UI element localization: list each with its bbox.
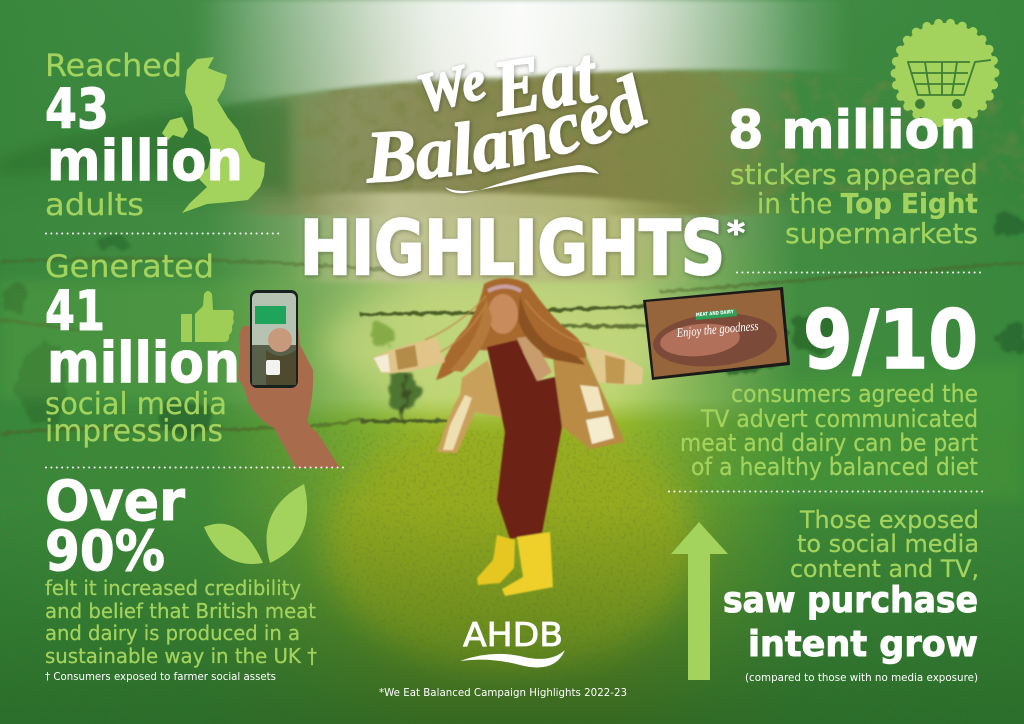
text: those exposed <box>790 506 979 583</box>
logo: We Eat Balanced: We <box>411 49 492 126</box>
text: Over: Over <box>45 469 185 533</box>
text: credibility sentence: and belief that British meat <box>45 599 316 623</box>
logo: AHDB <box>460 615 565 667</box>
dress <box>487 340 562 539</box>
arrow: up <box>671 522 728 680</box>
coat right <box>553 357 625 449</box>
text: TV sentence: TV advert communicated <box>700 405 978 433</box>
text: TV sentence <box>680 380 978 481</box>
boots <box>477 535 515 585</box>
logo: We Eat Balanced: Eat <box>486 31 604 134</box>
icon: UK map <box>162 57 265 213</box>
text: TV sentence: consumers agreed the <box>731 380 978 408</box>
text: credibility sentence: felt it increased credibility <box>45 576 301 600</box>
number: 8 million: 8 million <box>728 100 976 161</box>
grass speckle <box>0 430 1024 724</box>
text: saw purchase intent grow: saw purchase <box>723 580 978 621</box>
icon: TV screen: MEAT AND DAIRY <box>696 309 734 318</box>
face <box>488 294 518 334</box>
title: HIGHLIGHTS: * <box>727 214 745 252</box>
logo: We Eat Balanced: Balanced <box>366 72 650 186</box>
text: stickers sentence: supermarkets <box>785 217 978 250</box>
text: Reached: Reached <box>45 48 182 84</box>
pale valley field <box>290 192 700 282</box>
text: credibility sentence: sustainable way in the UK † <box>45 644 317 668</box>
text: million: million <box>47 129 243 194</box>
tree <box>370 323 419 420</box>
icon: thumbs up <box>181 291 234 342</box>
right and left far hills <box>680 72 1024 205</box>
text: credibility sentence: and dairy is produced in a <box>45 621 300 645</box>
text: stickers sentence: in the Top Eight <box>757 187 978 220</box>
panel: TV advert <box>643 287 978 481</box>
hair back <box>436 278 587 380</box>
title: HIGHLIGHTS: HIGHLIGHTS <box>300 204 725 292</box>
icon: TV screen: Enjoy the goodness <box>675 318 759 340</box>
text: million: million <box>47 331 240 396</box>
chest <box>517 336 552 382</box>
text: social media: social media <box>45 387 227 422</box>
number: 9/10: 9/10 <box>803 294 978 388</box>
text: stickers sentence: stickers appeared <box>730 158 978 191</box>
illustration: girl <box>373 278 643 596</box>
icon: leaves <box>204 484 307 564</box>
text: credibility sentence <box>45 576 317 668</box>
number: 43: 43 <box>45 77 109 141</box>
text: those exposed: content and TV, <box>790 555 979 583</box>
text: Generated: Generated <box>45 249 214 285</box>
sky glow <box>190 0 850 112</box>
hedgerows <box>0 259 1024 434</box>
number: 41: 41 <box>45 279 105 343</box>
icon: shopping cart badge <box>895 23 995 123</box>
text: 90%: 90% <box>45 519 165 583</box>
text: adults: adults <box>45 188 144 223</box>
logo: AHDB: AHDB <box>463 615 563 654</box>
text: stickers sentence <box>730 158 978 250</box>
text: those exposed: to social media <box>797 530 979 558</box>
footnote: compared: (compared to those with no media exposure) <box>745 671 978 684</box>
panel: social impressions <box>45 249 240 449</box>
text: those exposed: Those exposed <box>799 506 979 534</box>
icon: TV screen <box>643 287 790 380</box>
hair front <box>518 296 585 365</box>
text: impressions: impressions <box>45 414 223 449</box>
panel: credibility <box>45 469 317 683</box>
footnote: campaign highlights: *We Eat Balanced Campaign Highlights 2022-23 <box>379 686 627 699</box>
pale meadow <box>325 283 675 407</box>
footnote: consumers: † Consumers exposed to farmer social assets <box>45 670 276 683</box>
lighter field patches <box>0 280 1024 500</box>
text: TV sentence: meat and dairy can be part <box>680 429 978 457</box>
icon: hand holding phone <box>238 290 340 468</box>
coat left <box>437 360 505 453</box>
panel: reach <box>45 48 265 223</box>
grass yellow glow <box>325 420 695 670</box>
panel: stickers <box>728 23 995 250</box>
hills with autumn woodland <box>230 71 800 215</box>
left sleeve <box>373 338 445 373</box>
trees on left and right <box>3 212 1024 436</box>
panel: purchase intent <box>671 506 979 684</box>
panel: purchase intent: intent grow <box>748 624 978 665</box>
right sleeve <box>585 347 643 385</box>
text: TV sentence: of a healthy balanced diet <box>691 453 978 481</box>
